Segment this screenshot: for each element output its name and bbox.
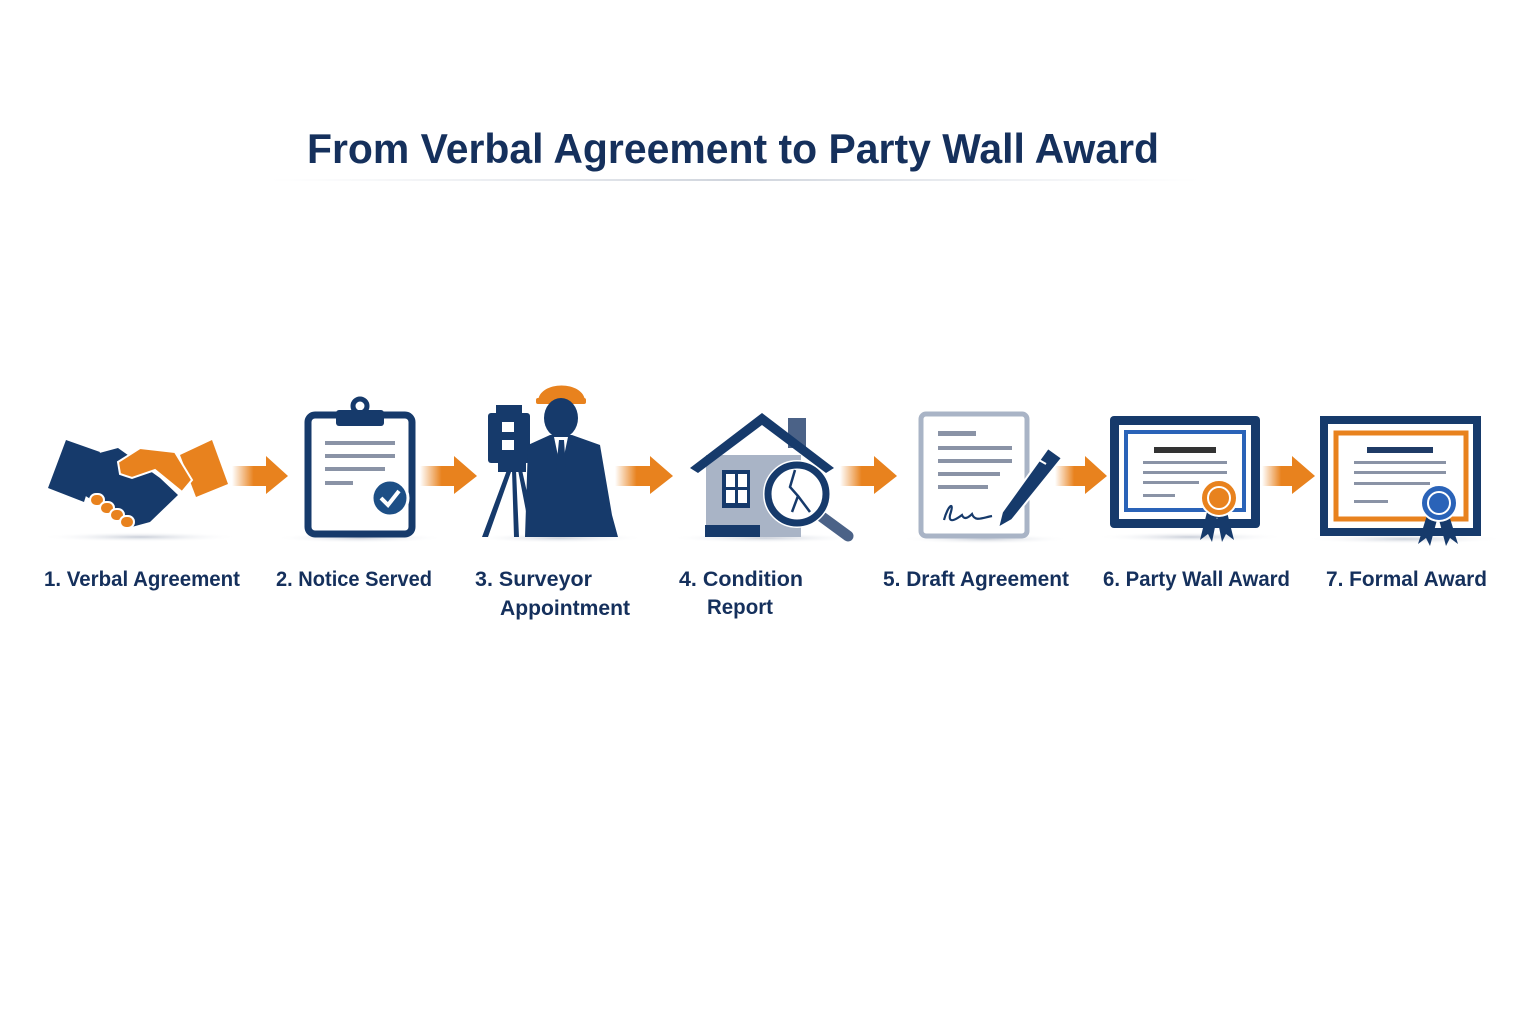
- shadows: [40, 532, 1505, 544]
- arrow 4: [840, 456, 897, 494]
- label 2: 2. Notice Served: [276, 568, 432, 591]
- icon: draft document with pen: [921, 414, 1062, 536]
- icon: surveyor: [482, 386, 618, 537]
- label 3: [475, 568, 630, 620]
- icon: party wall award certificate: [1110, 416, 1260, 542]
- label 4: 4. Condition: [679, 568, 803, 591]
- label 3: Appointment: [500, 597, 630, 620]
- label 3: 3. Surveyor: [475, 568, 592, 591]
- label 1: 1. Verbal Agreement: [44, 568, 240, 591]
- arrow 2: [420, 456, 477, 494]
- icon: house with magnifier: [690, 413, 848, 537]
- arrow 6: [1262, 456, 1315, 494]
- icon: handshake: [48, 440, 228, 528]
- label 7: 7. Formal Award: [1326, 568, 1487, 591]
- label 6: 6. Party Wall Award: [1103, 568, 1290, 591]
- arrow 1: [232, 456, 288, 494]
- icon: formal award certificate: [1320, 416, 1481, 546]
- label 5: 5. Draft Agreement: [883, 568, 1069, 591]
- icon: clipboard: [308, 399, 412, 534]
- title: From Verbal Agreement to Party Wall Award: [307, 125, 1159, 172]
- arrow 5: [1055, 456, 1107, 494]
- arrow 3: [615, 456, 673, 494]
- label 4: Report: [707, 596, 773, 619]
- label 4: [679, 568, 803, 619]
